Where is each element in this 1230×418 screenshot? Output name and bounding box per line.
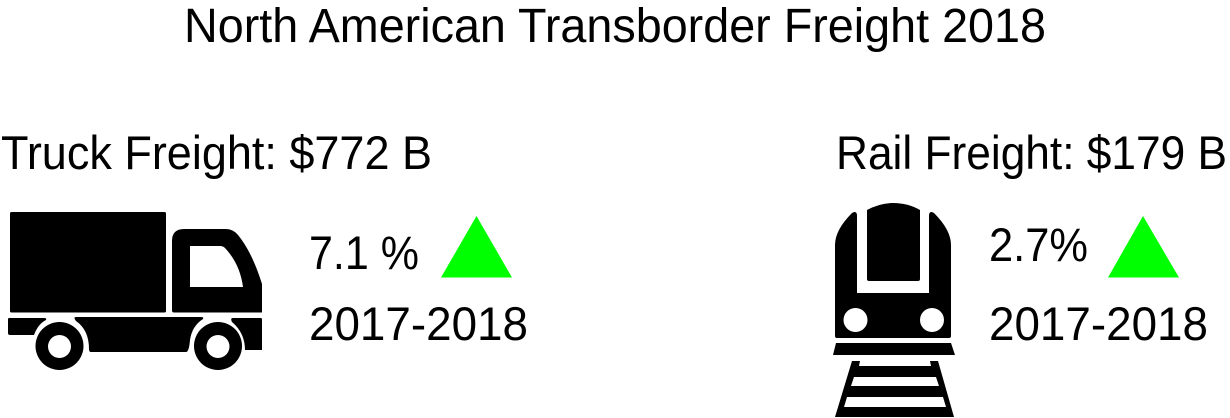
heading: truck freight: Truck Freight: $772 B	[1, 126, 432, 179]
icon: truck	[8, 212, 262, 370]
icon: truck up triangle	[441, 216, 512, 278]
truck change value: 7.1 %	[309, 226, 419, 279]
truck period: 2017-2018	[309, 297, 528, 350]
title: North American Transborder Freight 2018	[184, 0, 1046, 53]
icon: train	[833, 203, 955, 417]
rail period: 2017-2018	[989, 297, 1208, 350]
rail change value: 2.7%	[989, 218, 1088, 271]
icon: rail up triangle	[1108, 216, 1179, 278]
